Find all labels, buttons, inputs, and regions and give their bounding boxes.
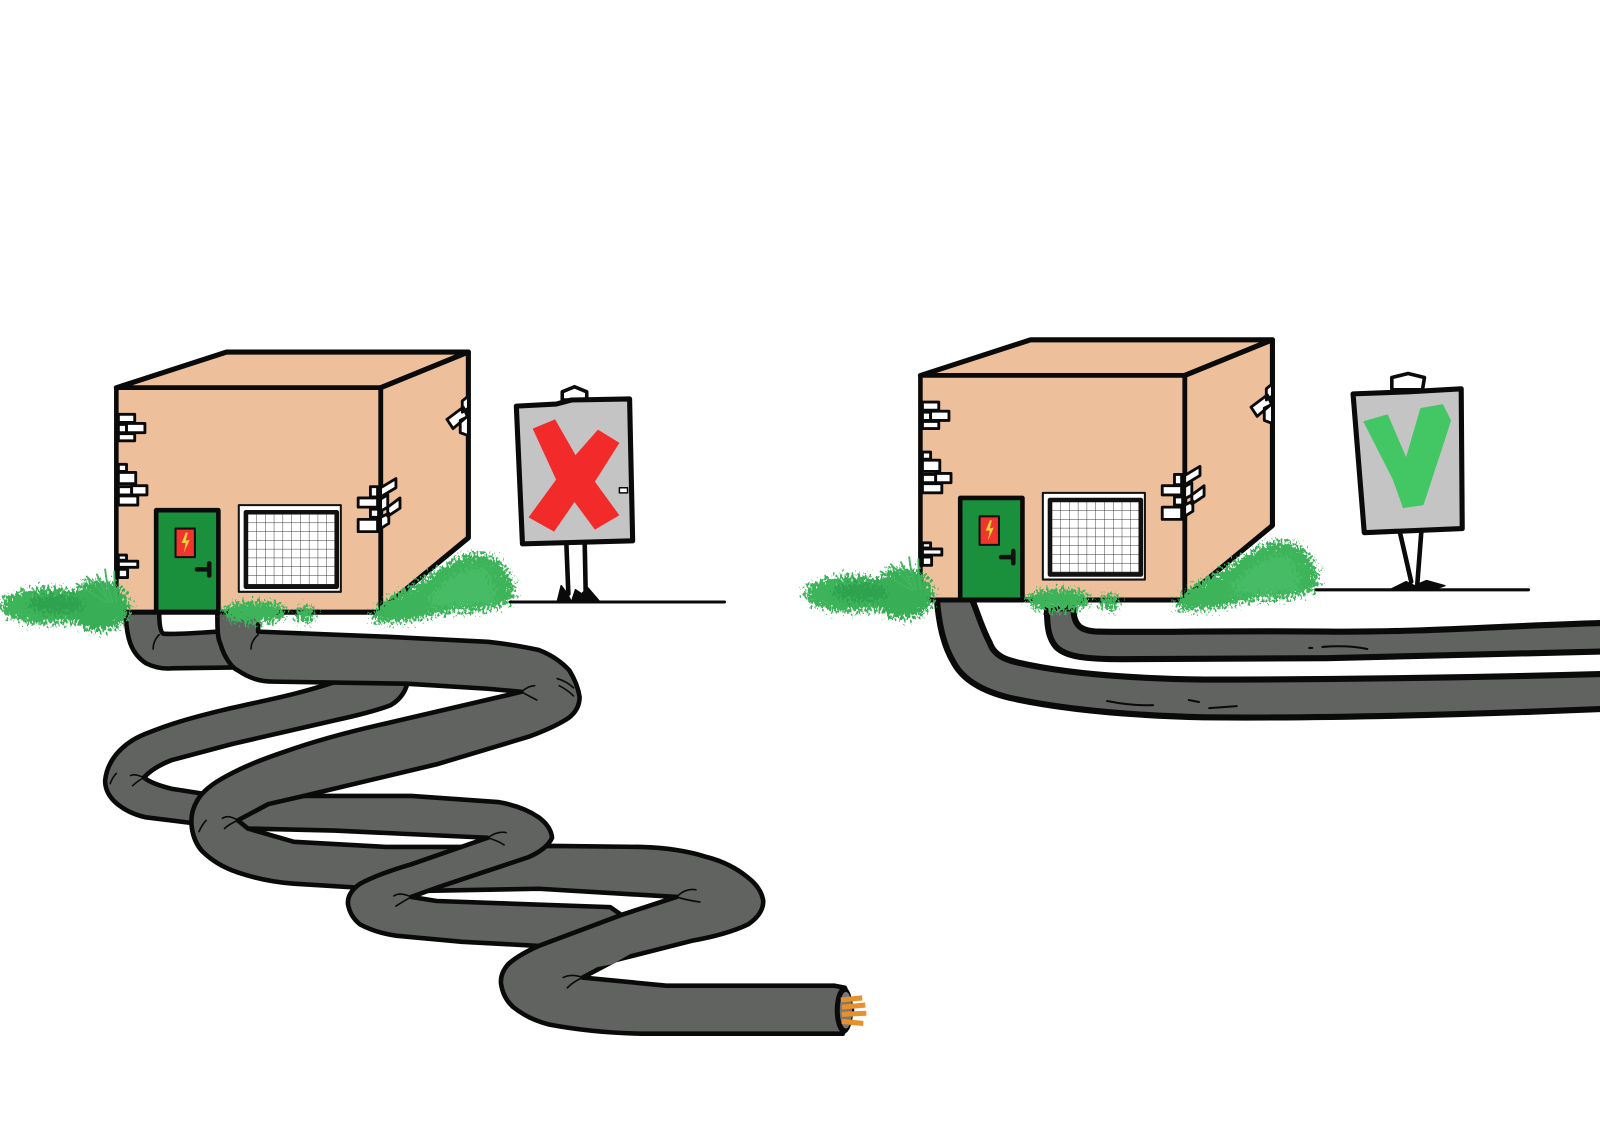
ground line: right [1316,588,1529,591]
cable: cut end with copper wires [835,987,866,1034]
cable: upper serpentine fill [191,612,620,946]
sign handle [562,387,587,400]
sign feet [557,586,600,602]
panel: wrong example, coiled cable [105,612,866,1034]
sign handle [1392,373,1424,390]
cable: first loop [105,679,408,824]
ground line: left [510,601,724,604]
cable: wrinkles at bends [110,635,700,988]
grass: centre tufts [222,601,315,623]
building: right substation with grass [804,340,1318,619]
cable: lower direct run [937,598,1600,717]
ventilation window [239,505,341,592]
bricks: wall decorations [118,396,468,578]
cable: surface scratches [1107,646,1367,708]
cable: upper serpentine outlines [191,612,620,946]
sign legs [1400,531,1421,584]
sign: green check marker [1353,373,1462,590]
building roof [116,352,468,388]
sign board [516,399,633,544]
sign side bracket [619,488,628,493]
sign feet [1390,581,1445,590]
cable: lower run to cut end [192,828,852,1034]
grass: left tuft [0,569,130,632]
door [156,510,218,612]
cable: first run from door [126,612,245,669]
panel: right example, direct cables [937,598,1600,717]
sign board [1353,389,1462,533]
grass: right mound [372,554,514,623]
building: left substation with grass [0,352,514,632]
cable: upper direct run [1047,608,1600,659]
door handle [197,563,209,575]
building front wall [116,388,381,612]
green check [1363,404,1451,508]
cable: overlap patch at last bend [508,897,694,980]
cable: last bend outline [508,897,677,964]
building side wall [381,352,468,610]
door danger sign [176,529,195,557]
sign: red cross marker [516,387,633,602]
ground line under building [125,610,381,615]
sign legs [566,543,586,594]
red cross [529,419,619,532]
